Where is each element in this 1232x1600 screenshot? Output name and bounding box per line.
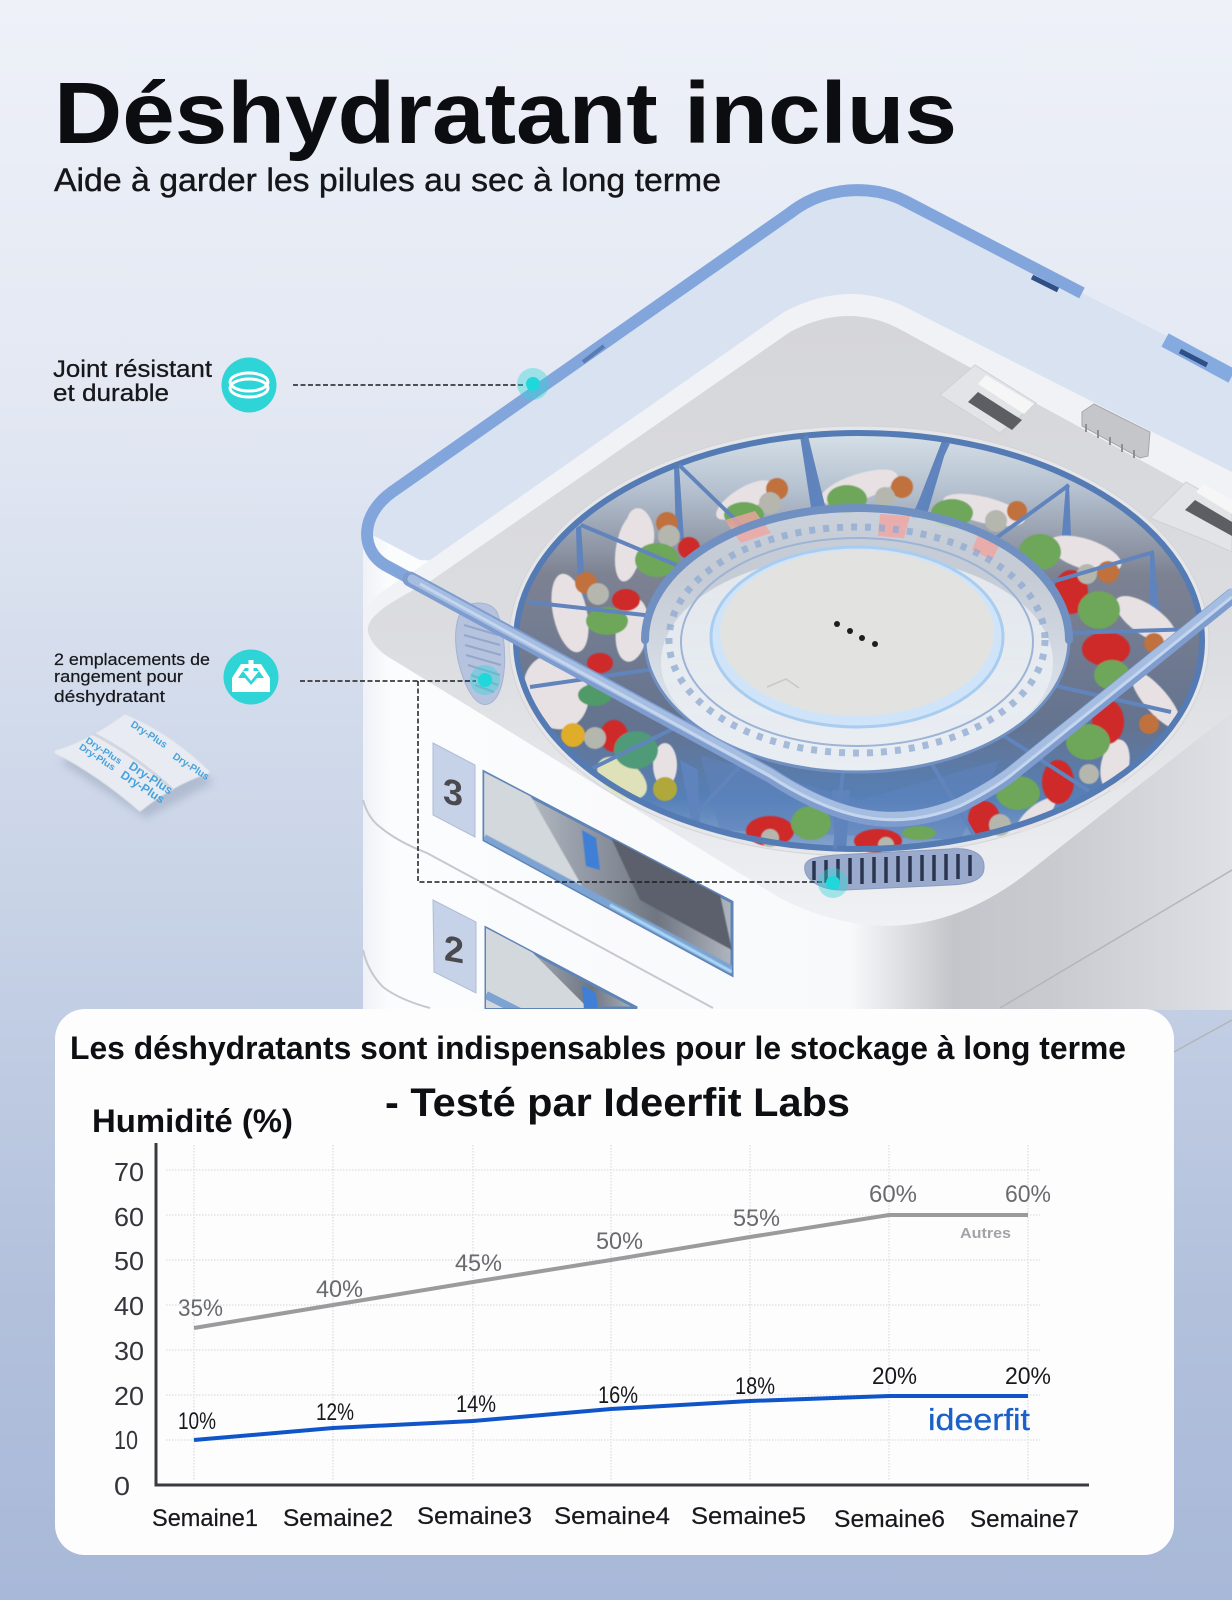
panel: humidity test chart — [55, 1009, 1174, 1555]
panel background — [55, 1009, 1174, 1555]
callout: resistant seal: et durable — [53, 380, 169, 407]
dispenser body — [363, 530, 1232, 1052]
y axis ticks: 30 — [114, 1336, 144, 1366]
capsules white and pink — [513, 462, 1188, 837]
drawer label 3: 3 — [443, 770, 463, 814]
drawer window 2 — [486, 928, 637, 1012]
series: autres: 40% — [316, 1276, 363, 1303]
x axis labels — [152, 1503, 1079, 1533]
icon: tray — [224, 650, 278, 704]
product illustration: pill dispenser — [363, 190, 1232, 1052]
x axis labels: Semaine7 — [970, 1506, 1079, 1533]
pills — [513, 462, 1188, 853]
desiccant packets: Dry-Plus — [77, 742, 117, 773]
callout: desiccant slots: rangement pour — [54, 667, 183, 686]
series: autres: 50% — [596, 1228, 643, 1255]
y axis ticks: 10 — [114, 1425, 138, 1455]
x axis labels: Semaine3 — [417, 1503, 532, 1530]
marker dot — [517, 368, 549, 400]
y axis ticks: 0 — [114, 1471, 130, 1501]
y axis ticks: 40 — [114, 1291, 144, 1321]
green pills — [578, 485, 1130, 840]
callout: desiccant slots: déshydratant — [54, 687, 165, 706]
x axis labels: Semaine2 — [283, 1505, 393, 1532]
pill wheel — [509, 426, 1209, 856]
desiccant ports — [940, 365, 1232, 552]
y axis ticks: 20 — [114, 1381, 144, 1411]
pale capsule — [589, 748, 655, 808]
desiccant packets: Dry-Plus — [118, 768, 167, 807]
series: autres: 35% — [178, 1295, 223, 1322]
series: ideerfit: ideerfit — [928, 1402, 1030, 1437]
series: autres: 45% — [455, 1250, 502, 1277]
series: autres: 60% — [1005, 1181, 1051, 1208]
marker dots — [470, 665, 848, 898]
drawer label 2 — [433, 900, 476, 993]
series: ideerfit: 10% — [178, 1408, 216, 1435]
series: ideerfit: 16% — [598, 1382, 638, 1409]
grey pills — [584, 487, 1099, 853]
y axis title: Humidité (%) — [92, 1103, 293, 1139]
y axis ticks: 70 — [114, 1157, 144, 1187]
callout: resistant seal — [53, 356, 549, 412]
series: ideerfit: 20% — [872, 1363, 917, 1390]
series: ideerfit: 20% — [1005, 1363, 1051, 1390]
series: autres: 55% — [733, 1205, 780, 1232]
icon: rings — [222, 358, 276, 412]
leader line — [300, 681, 826, 882]
title: Déshydratant inclus — [54, 65, 957, 162]
x axis labels: Semaine1 — [152, 1505, 258, 1532]
drawer window 3 — [484, 772, 732, 975]
subtitle: Aide à garder les pilules au sec à long terme — [54, 162, 721, 198]
orange pills — [575, 476, 1164, 734]
series: ideerfit: 18% — [735, 1373, 775, 1400]
series: autres — [178, 1181, 1051, 1328]
glass lid — [367, 190, 1232, 819]
x axis labels: Semaine4 — [554, 1503, 670, 1530]
drawer label 3 — [433, 743, 475, 837]
y axis ticks: 60 — [114, 1202, 144, 1232]
inner cylinder — [645, 508, 1069, 772]
wheel rim and spokes — [516, 433, 1202, 849]
compartment fins — [576, 436, 1160, 852]
axes — [156, 1143, 1089, 1485]
x axis labels: Semaine6 — [834, 1506, 945, 1533]
series: ideerfit: 14% — [456, 1391, 496, 1418]
label: joint: Joint résistant — [53, 356, 212, 383]
drawer label 2: 2 — [444, 927, 464, 971]
x axis labels: Semaine5 — [691, 1503, 806, 1530]
callout: desiccant slots — [54, 650, 848, 898]
y axis ticks: 50 — [114, 1246, 144, 1276]
line chart — [114, 1143, 1089, 1533]
panel subheading: - Testé par Ideerfit Labs — [385, 1081, 850, 1125]
desiccant packets: Dry-Plus — [170, 751, 211, 783]
y axis ticks — [114, 1157, 144, 1501]
desiccant packets — [56, 716, 214, 818]
red pills — [587, 537, 1130, 853]
desiccant packets: Dry-Plus — [128, 719, 169, 751]
desiccant packets: Dry-Plus — [83, 736, 124, 767]
series: autres: 60% — [869, 1181, 917, 1208]
label: emplacements: 2 emplacements de — [54, 650, 210, 669]
panel heading: Les déshydratants sont indispensables pour le stockage à long terme — [70, 1030, 1126, 1066]
top surface — [363, 294, 1232, 926]
series: ideerfit: 12% — [316, 1399, 354, 1426]
bottom vent — [805, 849, 984, 890]
leader line — [293, 384, 524, 386]
desiccant packets: Dry-Plus — [126, 759, 176, 798]
yellow pills — [561, 723, 585, 747]
series: ideerfit — [178, 1363, 1051, 1440]
left vent — [456, 603, 505, 704]
lid frame: blue seal — [367, 190, 1232, 820]
series: autres: Autres — [960, 1225, 1011, 1242]
